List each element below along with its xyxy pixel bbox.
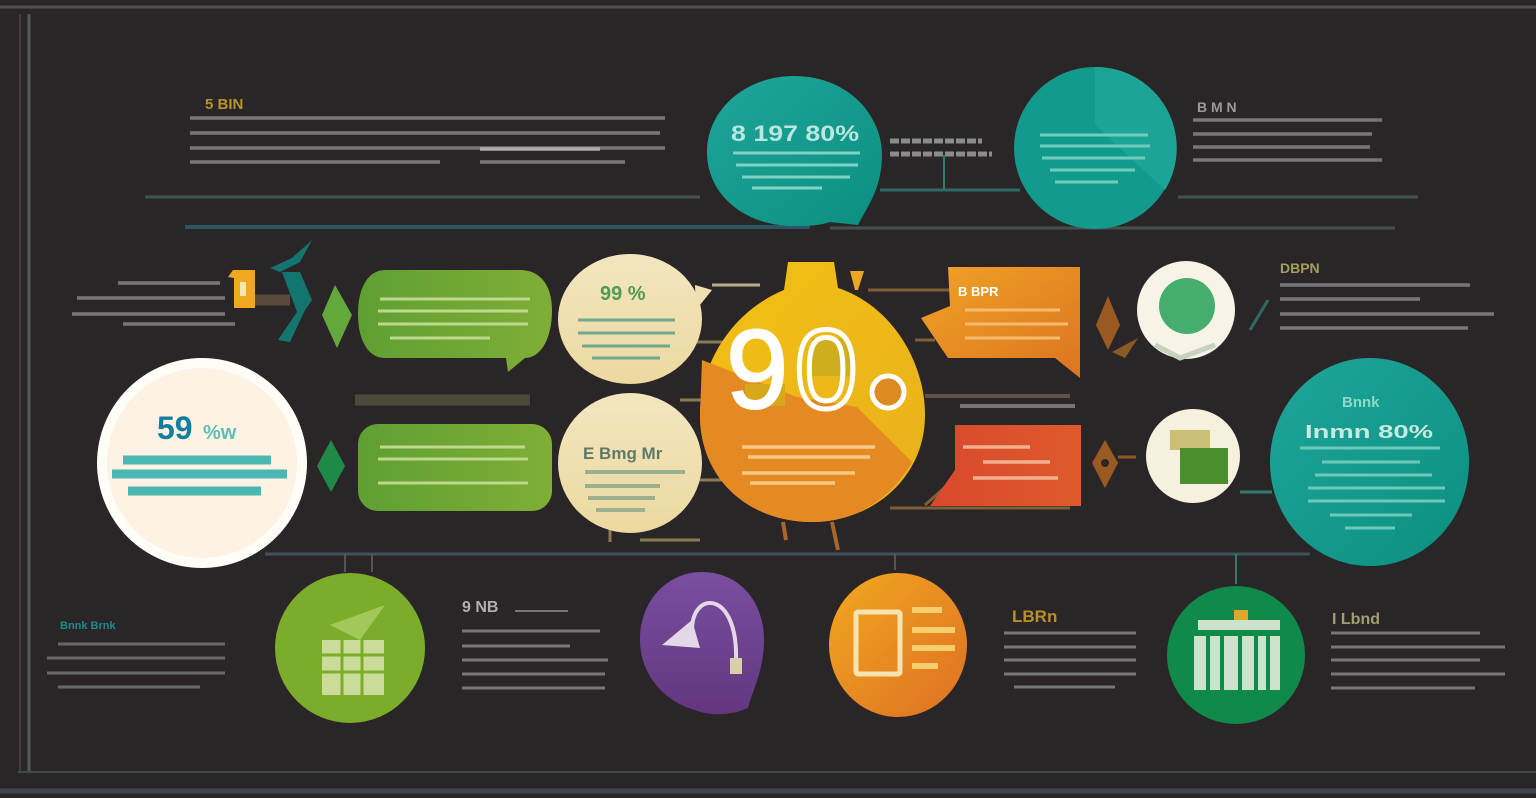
- text block: bottom centre left: [462, 599, 608, 688]
- callout: main orange circle: 9: [726, 307, 788, 432]
- icon: white ring lower: [1146, 409, 1240, 503]
- connector lines: [145, 155, 1418, 584]
- callout: cream lower: E Bmg Mr: [583, 444, 663, 463]
- callout: large white circle left: %w: [203, 422, 237, 444]
- text block: left upper with icon: [72, 270, 290, 324]
- callout: cream upper: [558, 254, 712, 384]
- callout: large white circle left: 59: [157, 410, 193, 446]
- callout: large white circle left: [97, 358, 307, 568]
- callout: main orange circle: 0: [795, 307, 857, 432]
- text block: bottom right: [1331, 611, 1505, 688]
- text block: top right: [1193, 99, 1382, 160]
- callout: cream lower: [558, 393, 702, 533]
- text block: top left: 5 BIN: [205, 96, 243, 113]
- text block: right upper: DBPN: [1280, 260, 1320, 276]
- icon: green leaf lower: [317, 440, 345, 492]
- icon: purple circle with lamp: [640, 572, 764, 714]
- callout: large teal circle right: Bnnk: [1342, 394, 1380, 411]
- callout: teal bubble top centre: 8 197 80%: [731, 121, 859, 146]
- text block: bottom centre right: LBRn: [1012, 607, 1057, 626]
- callout: large teal circle right: [1270, 358, 1469, 566]
- icon: green leaf upper: [322, 285, 352, 348]
- text block: between teal bubbles: [890, 141, 992, 154]
- callout: teal bubble top right: [1014, 67, 1177, 229]
- text block: bottom centre left: 9 NB: [462, 599, 498, 616]
- text block: bottom right: I Lbnd: [1332, 611, 1380, 628]
- icon: brown leaf upper right: [1096, 296, 1138, 358]
- callout: teal bubble top centre: [707, 76, 882, 226]
- callout: cream upper: 99 %: [600, 283, 646, 305]
- callout: red rectangle: [930, 425, 1081, 506]
- text block: bottom centre right: [1004, 607, 1136, 687]
- text block: bottom left: Bnnk Brnk: [60, 620, 116, 632]
- callout: orange rectangle: [921, 267, 1080, 378]
- icon: teal arrow: [270, 240, 312, 342]
- icon: small house: [228, 270, 255, 308]
- text block: right upper: [1280, 260, 1494, 328]
- callout: orange rectangle: B BPR: [958, 284, 999, 299]
- callout: green upper: [358, 270, 552, 372]
- icon: orange circle with device: [829, 573, 967, 717]
- callout: large teal circle right: Inmn 80%: [1305, 422, 1433, 442]
- callout: green lower: [358, 424, 552, 511]
- icon: green circle with building: [1167, 586, 1305, 724]
- text block: top left: [190, 96, 665, 162]
- icon: brown leaf lower right: [1092, 440, 1136, 488]
- icon: green circle with grid: [275, 573, 425, 723]
- callout: main orange circle: [700, 262, 925, 550]
- text block: top right: B M N: [1197, 99, 1237, 115]
- text block: bottom left: [47, 620, 225, 687]
- icon: white ring green: [1137, 261, 1235, 359]
